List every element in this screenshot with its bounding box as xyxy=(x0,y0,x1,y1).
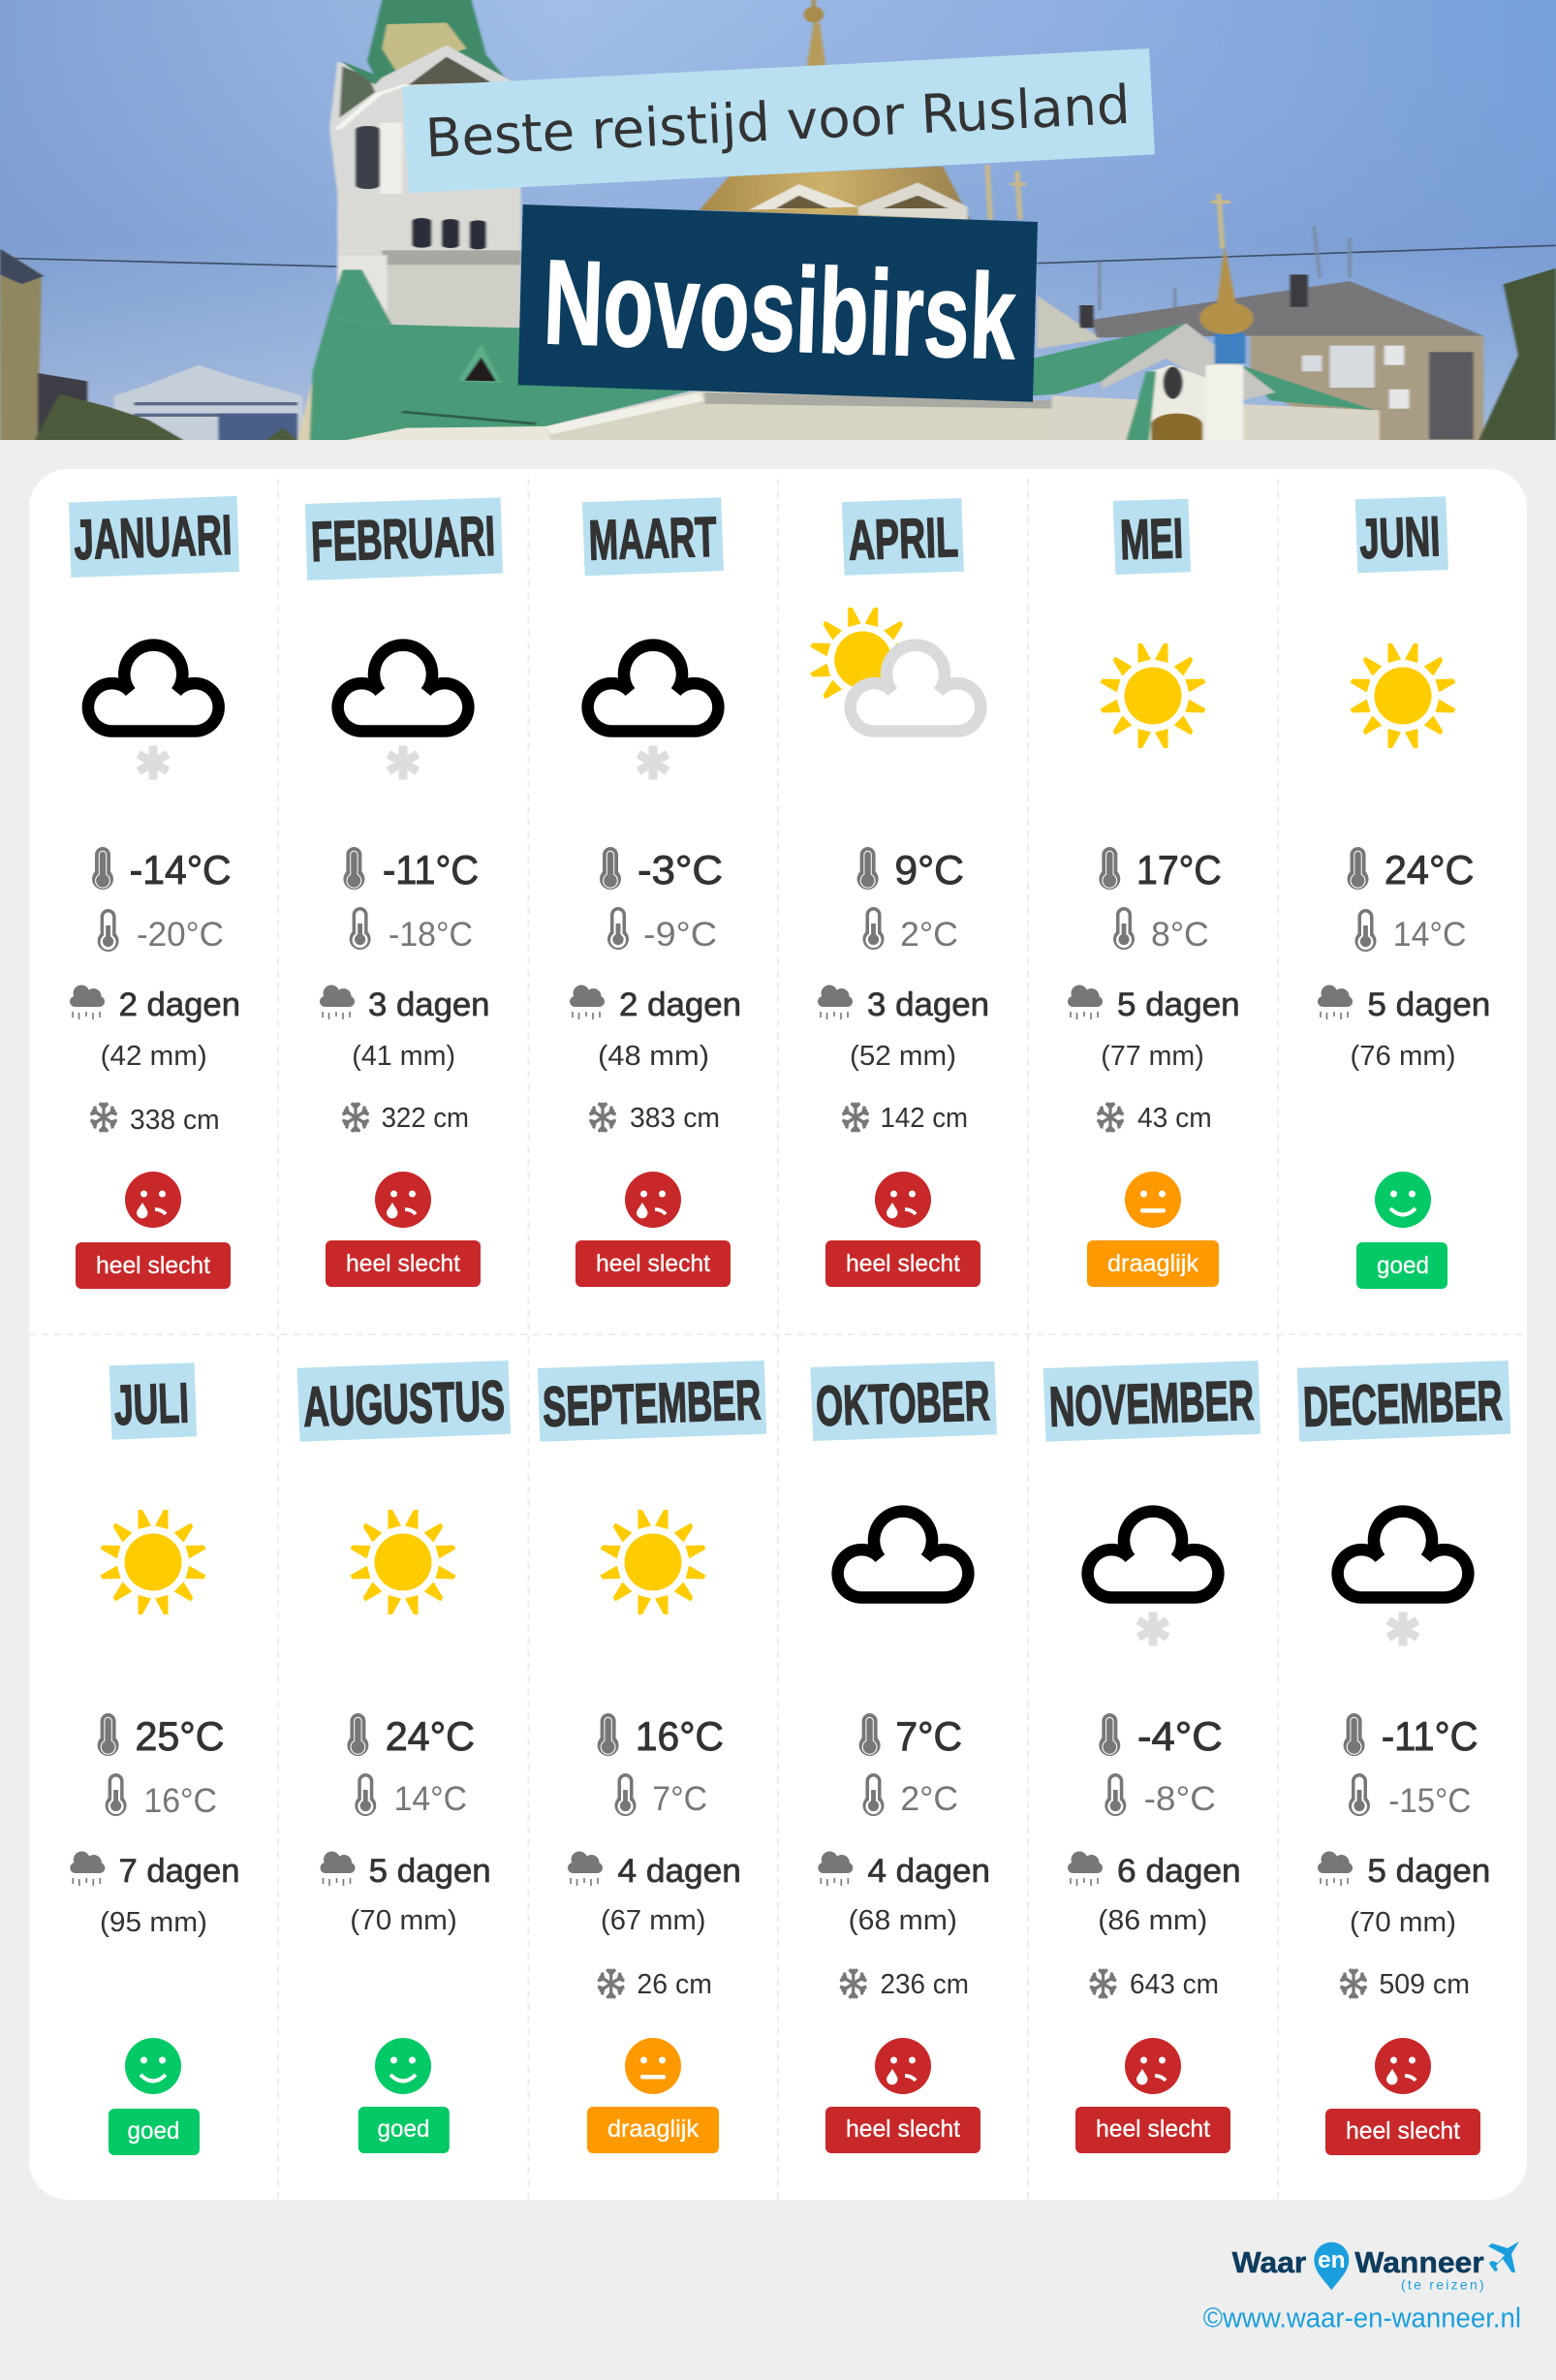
low temperature xyxy=(607,907,717,954)
month label xyxy=(109,1362,197,1440)
title banner: Beste reistijd voor Rusland xyxy=(402,48,1155,193)
snowfall: 236 cm xyxy=(880,1969,969,2000)
rain days xyxy=(568,1851,741,1890)
rainfall: (67 mm) xyxy=(601,1905,705,1936)
low temperature xyxy=(614,1773,707,1818)
snowfall: 643 cm xyxy=(1130,1969,1219,2000)
low temperature: -8°C xyxy=(1144,1780,1216,1818)
rain days: 5 dagen xyxy=(1367,1853,1490,1890)
rating face xyxy=(625,2038,681,2094)
low temperature: -9°C xyxy=(643,916,717,954)
high temperature: -14°C xyxy=(130,847,232,892)
month label xyxy=(1113,499,1191,575)
snowfall xyxy=(840,1969,969,2000)
snowfall xyxy=(1340,1969,1470,2000)
rating badge xyxy=(1356,1242,1447,1289)
high temperature xyxy=(343,847,479,892)
month label xyxy=(810,1362,997,1441)
month label xyxy=(842,498,964,576)
rain days xyxy=(1068,1851,1241,1890)
rating badge: draaglijk xyxy=(1107,1250,1198,1277)
low temperature: 14°C xyxy=(394,1780,467,1818)
panel: november xyxy=(1043,1361,1260,2153)
snowfall xyxy=(90,1103,220,1136)
high temperature xyxy=(859,1713,962,1759)
high temperature: 16°C xyxy=(636,1713,724,1759)
rain days: 4 dagen xyxy=(868,1853,990,1890)
icon: cloud with snow xyxy=(1088,1512,1218,1645)
icon: cloud xyxy=(838,1512,968,1598)
rating badge xyxy=(1087,1240,1219,1287)
rating face xyxy=(125,2038,181,2094)
snowfall xyxy=(1089,1969,1219,2000)
low temperature xyxy=(98,909,224,954)
icon: cloud with snow xyxy=(88,645,219,779)
month label xyxy=(582,497,724,576)
low temperature: -20°C xyxy=(137,916,224,954)
month label: APRIL xyxy=(848,506,959,572)
rain days xyxy=(1318,985,1490,1023)
panel: juli xyxy=(70,1362,240,2155)
icon: sun xyxy=(1350,643,1456,748)
icon: cloud with snow xyxy=(588,645,718,779)
low temperature xyxy=(1354,909,1466,954)
low temperature: -18°C xyxy=(389,916,473,954)
snowfall xyxy=(1097,1103,1212,1134)
title banner: Beste reistijd voor Rusland: Beste reistijd voor Rusland xyxy=(424,74,1132,170)
rainfall: (76 mm) xyxy=(1351,1041,1455,1072)
panel: augustus xyxy=(297,1361,511,2153)
rating badge: goed xyxy=(128,2117,180,2145)
rating badge xyxy=(825,2107,980,2153)
high temperature: -3°C xyxy=(638,847,723,892)
footer website link: ©www.waar-en-wanneer.nl xyxy=(1203,2303,1521,2334)
icon: sun xyxy=(350,1510,456,1614)
low temperature xyxy=(862,1773,958,1818)
panel: maart xyxy=(570,497,741,1287)
rating face xyxy=(875,1172,931,1228)
high temperature xyxy=(600,847,723,892)
month label: MEI xyxy=(1119,507,1184,572)
month label: OKTOBER xyxy=(815,1369,991,1438)
high temperature xyxy=(1099,1713,1223,1759)
rainfall: (41 mm) xyxy=(352,1041,455,1072)
rating badge: heel slecht xyxy=(846,2115,960,2143)
rain days: 4 dagen xyxy=(618,1853,741,1890)
panel: april xyxy=(810,498,989,1287)
month label: NOVEMBER xyxy=(1048,1369,1255,1439)
footer logo: Waar en Wanneer: (te reizen) xyxy=(1401,2277,1484,2293)
low temperature xyxy=(862,907,958,954)
rating badge: goed xyxy=(1377,1252,1429,1279)
panel: februari xyxy=(305,497,503,1287)
snowfall: 43 cm xyxy=(1137,1103,1212,1134)
snowfall: 322 cm xyxy=(382,1103,469,1134)
rain days xyxy=(320,1851,491,1890)
high temperature: 7°C xyxy=(895,1713,962,1759)
title banner: Novosibirsk: Novosibirsk xyxy=(542,235,1018,385)
rainfall: (77 mm) xyxy=(1101,1041,1204,1072)
panel: januari xyxy=(69,496,240,1289)
icon: sun behind cloud xyxy=(810,608,980,732)
low temperature: 2°C xyxy=(900,1780,958,1818)
icon: sun xyxy=(100,1510,206,1614)
rainfall: (52 mm) xyxy=(850,1041,956,1072)
icon: sun xyxy=(1100,643,1206,748)
rating badge: goed xyxy=(378,2115,430,2143)
rain days: 6 dagen xyxy=(1117,1853,1241,1890)
rating badge xyxy=(1325,2109,1480,2155)
rain days xyxy=(70,1851,240,1890)
rain days xyxy=(570,985,741,1023)
low temperature xyxy=(1105,1773,1216,1818)
rating badge xyxy=(1075,2107,1230,2153)
panel: mei xyxy=(1068,499,1240,1287)
panel: climate card xyxy=(29,469,1527,2200)
icon: airplane xyxy=(1488,2241,1519,2272)
snowfall: 383 cm xyxy=(630,1103,720,1134)
low temperature xyxy=(350,907,473,954)
month label: FEBRUARI xyxy=(310,505,496,574)
icon: sun xyxy=(600,1510,706,1614)
month label: JULI xyxy=(113,1371,190,1437)
rating face xyxy=(375,1172,431,1228)
rain days xyxy=(818,985,989,1023)
high temperature xyxy=(1344,1713,1478,1759)
rain days xyxy=(320,985,490,1023)
high temperature xyxy=(1347,847,1474,892)
icon: map pin: en xyxy=(1318,2247,1346,2273)
icon: map pin xyxy=(1314,2242,1349,2290)
rating face xyxy=(1375,2038,1431,2094)
rating badge: heel slecht xyxy=(96,1252,210,1279)
low temperature xyxy=(1349,1773,1471,1820)
rating face xyxy=(1125,1172,1181,1228)
high temperature: 24°C xyxy=(1385,847,1474,892)
high temperature: -11°C xyxy=(1382,1713,1478,1759)
month label xyxy=(297,1361,511,1442)
high temperature: 17°C xyxy=(1136,847,1222,892)
snowfall xyxy=(342,1103,469,1134)
high temperature xyxy=(347,1713,475,1759)
month label: SEPTEMBER xyxy=(542,1368,762,1439)
high temperature: -11°C xyxy=(383,847,479,892)
rating badge: heel slecht xyxy=(346,1250,460,1277)
rating face xyxy=(125,1172,181,1228)
month label xyxy=(305,497,503,580)
rainfall: (70 mm) xyxy=(1350,1907,1456,1938)
rating badge xyxy=(358,2107,450,2153)
snowfall: 142 cm xyxy=(880,1103,968,1134)
footer logo: Waar en Wanneer: Wanneer xyxy=(1354,2245,1484,2279)
month label: MAART xyxy=(588,506,718,572)
month label xyxy=(538,1361,766,1442)
low temperature: 16°C xyxy=(143,1782,217,1820)
rain days: 2 dagen xyxy=(619,986,741,1023)
panel: oktober xyxy=(810,1362,997,2153)
low temperature: 7°C xyxy=(652,1780,707,1818)
rain days: 5 dagen xyxy=(1367,986,1490,1023)
low temperature xyxy=(1113,907,1209,954)
high temperature xyxy=(98,1713,224,1759)
month label: JUNI xyxy=(1358,505,1441,571)
rating badge: heel slecht xyxy=(596,1250,710,1277)
panel: september xyxy=(538,1361,766,2153)
rating face xyxy=(1375,1172,1431,1228)
high temperature: 24°C xyxy=(386,1713,475,1759)
rating badge xyxy=(109,2109,200,2155)
low temperature: 8°C xyxy=(1151,916,1209,954)
low temperature: -15°C xyxy=(1388,1782,1471,1820)
snowfall: 338 cm xyxy=(130,1105,220,1136)
rating badge: heel slecht xyxy=(846,1250,960,1277)
month label: AUGUSTUS xyxy=(302,1369,506,1439)
rain days: 7 dagen xyxy=(118,1853,240,1890)
rainfall: (68 mm) xyxy=(849,1905,957,1936)
rating badge: heel slecht xyxy=(1096,2115,1210,2143)
panel: juni xyxy=(1318,496,1490,1289)
rain days xyxy=(818,1851,990,1890)
footer logo: Waar en Wanneer xyxy=(1232,2241,1519,2293)
rainfall: (95 mm) xyxy=(100,1907,207,1938)
high temperature xyxy=(1099,847,1222,892)
month label xyxy=(69,496,239,578)
rain days: 3 dagen xyxy=(368,986,490,1023)
rainfall: (42 mm) xyxy=(101,1041,207,1072)
rating badge xyxy=(825,1240,980,1287)
high temperature: 25°C xyxy=(136,1713,225,1759)
panel: december xyxy=(1297,1361,1510,2155)
low temperature: 14°C xyxy=(1393,916,1466,954)
rain days xyxy=(1068,985,1240,1023)
rating face xyxy=(375,2038,431,2094)
icon: cloud with snow xyxy=(1338,1512,1468,1645)
snowfall: 26 cm xyxy=(637,1969,712,2000)
low temperature xyxy=(355,1773,467,1818)
rating face xyxy=(625,1172,681,1228)
high temperature: 9°C xyxy=(894,847,964,892)
rating badge xyxy=(326,1240,481,1287)
rating badge xyxy=(587,2107,719,2153)
header photo: church in Novosibirsk xyxy=(0,0,1556,440)
snowfall xyxy=(842,1103,968,1134)
month label xyxy=(1355,496,1448,573)
rain days: 2 dagen xyxy=(119,986,240,1023)
rating badge: draaglijk xyxy=(607,2115,699,2143)
low temperature: 2°C xyxy=(900,916,958,954)
rating badge xyxy=(576,1240,731,1287)
snowfall xyxy=(589,1103,720,1134)
rating badge xyxy=(76,1242,231,1289)
icon: cloud with snow xyxy=(338,645,468,779)
rainfall: (70 mm) xyxy=(350,1905,457,1936)
footer logo: Waar en Wanneer: Waar xyxy=(1232,2245,1306,2279)
rating face xyxy=(875,2038,931,2094)
snowfall xyxy=(598,1969,712,2000)
month label xyxy=(1043,1361,1260,1442)
month label: JANUARI xyxy=(73,504,233,572)
high temperature xyxy=(857,847,964,892)
low temperature xyxy=(106,1773,217,1820)
high temperature: -4°C xyxy=(1137,1713,1223,1759)
rainfall: (48 mm) xyxy=(598,1041,709,1072)
rain days: 5 dagen xyxy=(369,1853,491,1890)
rain days: 3 dagen xyxy=(867,986,989,1023)
high temperature xyxy=(598,1713,724,1759)
rain days xyxy=(70,985,240,1023)
rain days: 5 dagen xyxy=(1117,986,1240,1023)
title banner: Novosibirsk xyxy=(518,204,1038,402)
rainfall: (86 mm) xyxy=(1098,1905,1207,1936)
rain days xyxy=(1318,1851,1490,1890)
rating face xyxy=(1125,2038,1181,2094)
snowfall: 509 cm xyxy=(1379,1969,1470,2000)
rating badge: heel slecht xyxy=(1346,2117,1460,2145)
